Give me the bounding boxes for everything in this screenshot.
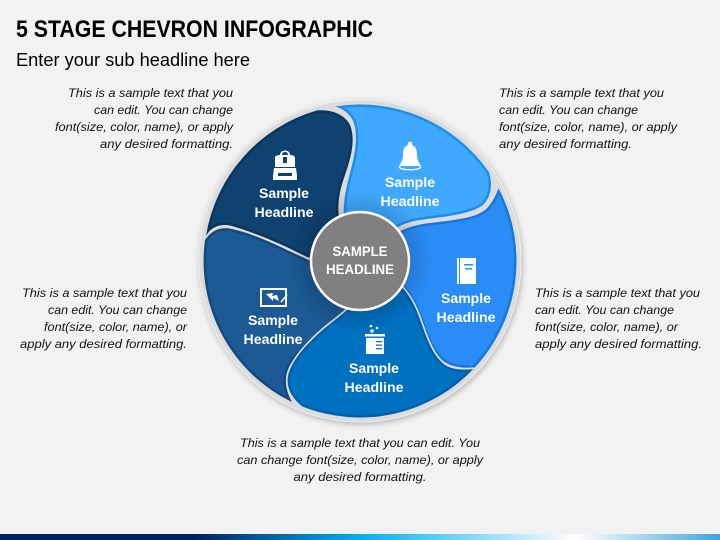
text block: top right: any desired formatting.	[499, 137, 632, 151]
text block: right: can edit. You can change	[535, 303, 674, 317]
segment: light blue top right	[335, 104, 491, 235]
label: bright blue	[436, 291, 496, 325]
text block: right: This is a sample text that you	[535, 286, 700, 300]
text block: right	[535, 286, 702, 351]
text block: top right: This is a sample text that you	[499, 86, 664, 100]
center label: HEADLINE	[326, 262, 394, 277]
icon: book	[457, 258, 476, 284]
text block: top left: font(size, color, name), or apply	[55, 120, 234, 134]
segment: bright blue right	[400, 188, 516, 368]
label: bright blue: Headline	[436, 310, 496, 325]
text block: right: apply any desired formatting.	[535, 337, 702, 351]
text block: left: This is a sample text that you	[22, 286, 187, 300]
text block: left: apply any desired formatting.	[20, 337, 187, 351]
text block: left: can edit. You can change	[48, 303, 187, 317]
label: navy	[254, 186, 314, 220]
text block: left: font(size, color, name), or	[44, 320, 188, 334]
label: navy: Headline	[254, 205, 314, 220]
icon: chart screen	[261, 289, 287, 306]
icon: beaker	[365, 325, 385, 354]
outer ring	[199, 100, 521, 422]
label: steel blue	[244, 313, 303, 347]
label: medium blue	[344, 361, 404, 395]
label: steel blue: Headline	[244, 332, 303, 347]
text block: top right: can edit. You can change	[499, 103, 638, 117]
text block: top right	[499, 86, 678, 151]
center label: SAMPLE	[332, 244, 388, 259]
label: light blue	[380, 175, 440, 209]
sub headline: Enter your sub headline here	[16, 50, 250, 70]
text block: top left: any desired formatting.	[100, 137, 233, 151]
text block: bottom: any desired formatting.	[294, 470, 426, 484]
text block: right: font(size, color, name), or	[535, 320, 679, 334]
text block: bottom: can change font(size, color, name), or apply	[237, 453, 484, 467]
icon: backpack	[273, 150, 297, 180]
label: bright blue: Sample	[441, 291, 492, 306]
bottom gradient bar	[0, 534, 720, 540]
chevron wheel	[199, 100, 521, 422]
label: medium blue: Sample	[349, 361, 400, 376]
title: 5 STAGE CHEVRON INFOGRAPHIC	[16, 16, 373, 43]
center label	[326, 244, 394, 277]
text block: top right: font(size, color, name), or apply	[499, 120, 678, 134]
text block: top left: can edit. You can change	[94, 103, 233, 117]
label: light blue: Headline	[380, 194, 440, 209]
text block: top left: This is a sample text that you	[68, 86, 233, 100]
label: medium blue: Headline	[344, 380, 404, 395]
label: light blue: Sample	[385, 175, 436, 190]
label: navy: Sample	[259, 186, 310, 201]
center circle	[311, 212, 409, 310]
text block: top left	[55, 86, 234, 151]
text block: bottom: This is a sample text that you can edit. You	[240, 436, 480, 450]
text block: left	[20, 286, 188, 351]
center shadow	[288, 189, 432, 333]
label: steel blue: Sample	[248, 313, 299, 328]
segment: medium blue bottom	[288, 285, 473, 417]
text block: bottom	[237, 436, 484, 484]
segment: steel blue left	[204, 228, 360, 402]
segment: navy top left	[206, 110, 353, 262]
icon: bell	[399, 142, 421, 170]
